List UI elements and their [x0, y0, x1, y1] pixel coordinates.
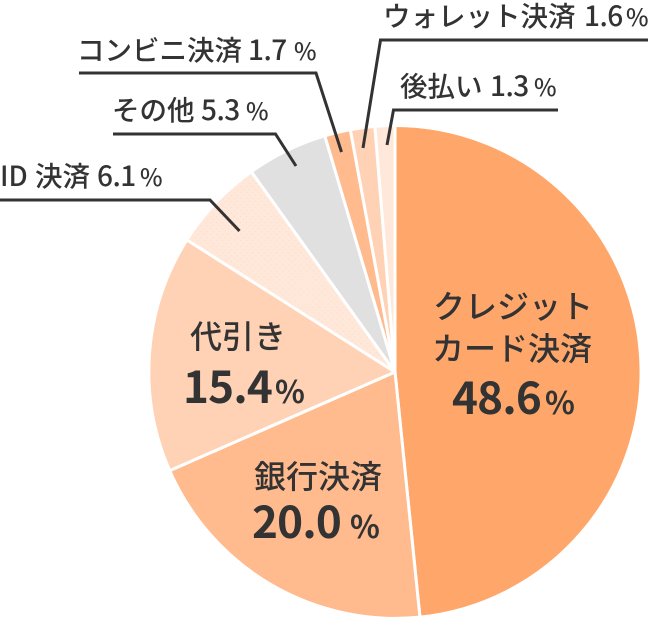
label: credit card: クレジット — [433, 282, 593, 328]
label: other 5.3%: 5.3 — [201, 89, 240, 129]
label: credit card: % — [545, 378, 575, 423]
slice: convenience store 1.7% — [325, 130, 395, 372]
label: deferred payment 1.3%: % — [534, 68, 557, 103]
label: bank transfer: 銀行決済 — [254, 452, 382, 498]
leader line: convenience store — [79, 73, 342, 152]
slice: cash on delivery 15.4% — [149, 240, 395, 471]
slice: wallet 1.6% — [350, 126, 395, 372]
leader line: ID payment — [0, 200, 240, 231]
label: ID payment 6.1%: 6.1 — [97, 155, 136, 195]
leader line: other — [113, 134, 296, 166]
label: bank transfer: % — [350, 502, 380, 547]
label: other 5.3%: その他 — [112, 88, 194, 128]
slice: bank transfer 20.0% — [170, 372, 420, 618]
label: convenience store 1.7%: 1.7 — [248, 29, 287, 69]
label: ID payment 6.1%: ID — [0, 154, 28, 194]
label: ID payment 6.1%: % — [140, 158, 163, 193]
label: cash on delivery: 代引き — [190, 312, 286, 358]
label: convenience store 1.7%: コンビニ決済 — [77, 28, 242, 68]
label: credit card: カード決済 — [432, 324, 592, 370]
label: deferred payment 1.3%: 後払い — [400, 64, 482, 104]
label: cash on delivery: % — [275, 367, 305, 412]
label: credit card: 48.6 — [452, 363, 541, 427]
slice: other 5.3% — [251, 136, 395, 372]
label: cash on delivery: 15.4 — [183, 352, 272, 416]
label: bank transfer: 20.0 — [252, 487, 341, 551]
label: other 5.3%: % — [246, 92, 269, 127]
leader line: deferred payment — [387, 110, 558, 145]
slice: ID payment 6.1% — [187, 172, 395, 372]
leader line: wallet — [363, 40, 648, 148]
slice: credit card 48.6% — [395, 126, 641, 617]
slice: deferred payment 1.3% — [375, 126, 395, 372]
label: ID payment 6.1%: 決済 — [35, 154, 90, 194]
pie chart — [149, 126, 641, 618]
label: convenience store 1.7%: % — [294, 32, 317, 67]
label: deferred payment 1.3%: 1.3 — [490, 65, 529, 105]
